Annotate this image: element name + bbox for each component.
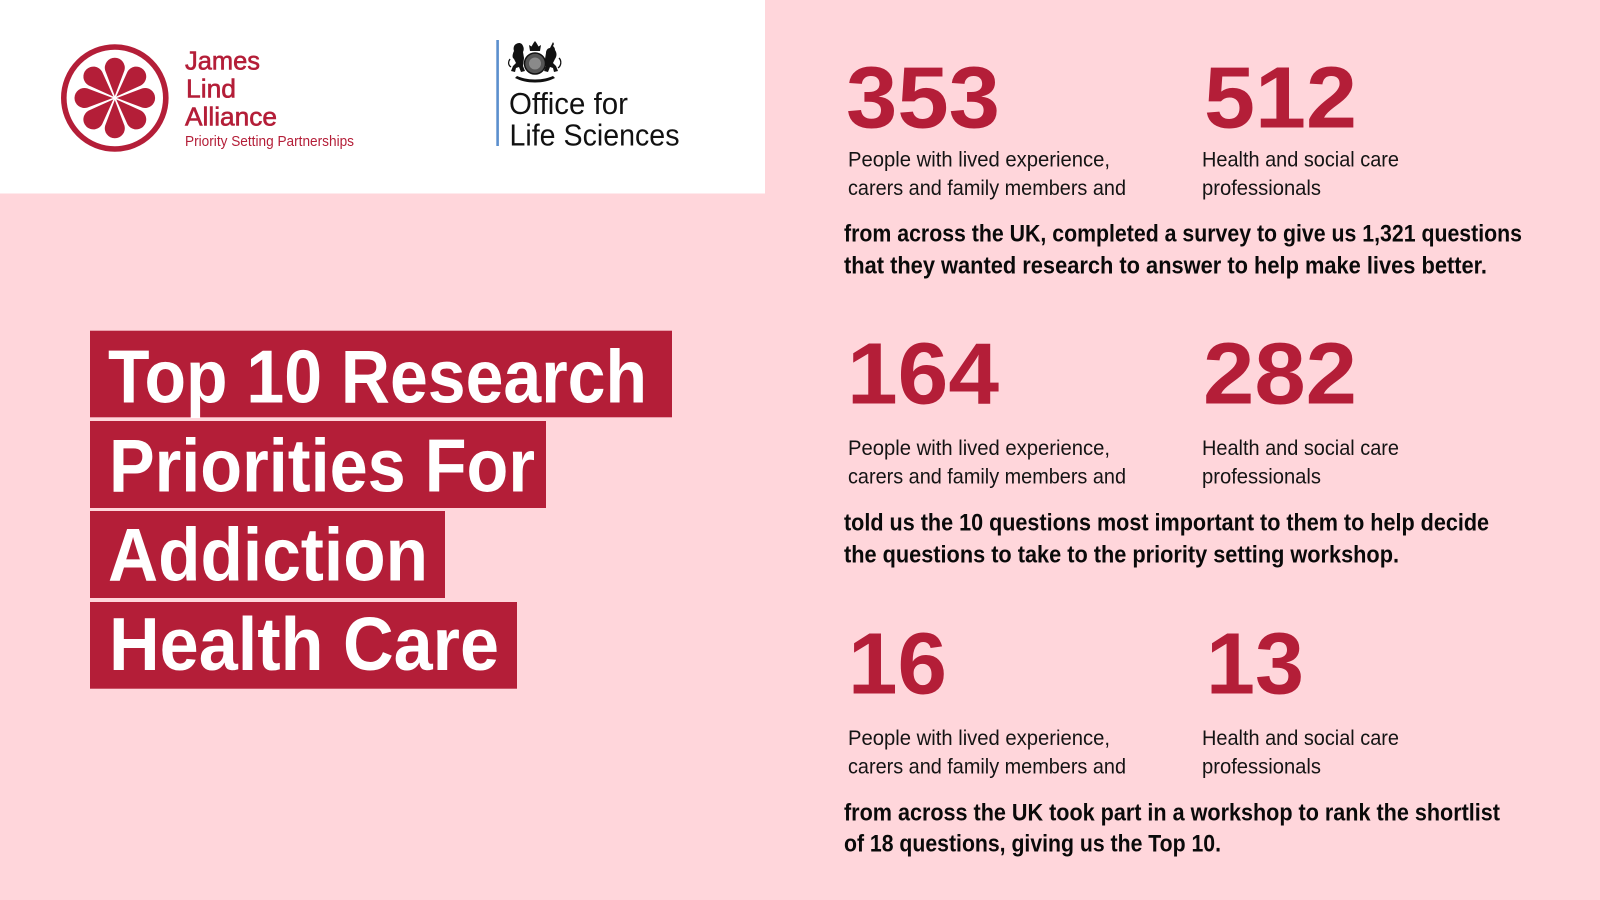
text: workshop summary: from across the UK took part in a workshop to rank the shortlist bbox=[844, 800, 1500, 827]
logo wordmark: Office for bbox=[509, 86, 628, 121]
title line 4: Health Care bbox=[109, 602, 499, 686]
text: workshop summary bbox=[844, 800, 1500, 858]
stat: 16 people with lived experience: carers and family members and bbox=[848, 755, 1126, 778]
stat: 512 health and social care professionals: professionals bbox=[1202, 177, 1321, 200]
text: workshop summary: of 18 questions, giving us the Top 10. bbox=[844, 831, 1221, 858]
stat: 164 people with lived experience: 164 bbox=[847, 325, 999, 422]
stat: 164 people with lived experience bbox=[847, 325, 1126, 488]
text: shortlisting summary: the questions to take to the priority setting workshop. bbox=[844, 541, 1399, 568]
stat: 13 health and social care professionals: 13 bbox=[1206, 615, 1304, 712]
panel: shortlisting stats bbox=[844, 325, 1489, 568]
title line 3: Addiction bbox=[108, 513, 428, 597]
logo: Office for Life Sciences: Life Sciences bbox=[510, 118, 680, 152]
stat: 282 health and social care professionals: professionals bbox=[1202, 465, 1321, 488]
panel: logo header bbox=[0, 0, 765, 194]
stat: 13 health and social care professionals: Health and social care bbox=[1202, 727, 1399, 750]
text: shortlisting summary bbox=[844, 510, 1489, 568]
text: survey summary: from across the UK, completed a survey to give us 1,321 questions bbox=[844, 221, 1522, 248]
icon: royal coat of arms bbox=[509, 41, 561, 82]
logo wordmark: James bbox=[185, 46, 260, 76]
stat: 164 people with lived experience: People with lived experience, bbox=[848, 437, 1110, 460]
stat: 282 health and social care professionals: 282 bbox=[1203, 325, 1357, 422]
stat: 353 people with lived experience: carers and family members and bbox=[848, 177, 1126, 200]
stat: 353 people with lived experience: People with lived experience, bbox=[848, 149, 1110, 172]
logo wordmark bbox=[185, 46, 277, 132]
stat: 16 people with lived experience bbox=[848, 615, 1126, 778]
stat: 13 health and social care professionals bbox=[1202, 615, 1399, 778]
stat: 282 health and social care professionals bbox=[1202, 325, 1399, 488]
title line 2: Priorities For bbox=[109, 424, 535, 508]
logo wordmark: Lind bbox=[186, 74, 236, 104]
stat: 512 health and social care professionals bbox=[1202, 50, 1399, 200]
logo wordmark: Alliance bbox=[185, 102, 277, 132]
text: survey summary bbox=[844, 221, 1522, 279]
stat: 16 people with lived experience: People with lived experience, bbox=[848, 727, 1110, 750]
heading: Top 10 Research Priorities For Addiction Health Care bbox=[90, 331, 672, 689]
title line 1: Top 10 Research bbox=[108, 335, 647, 419]
stat: 353 people with lived experience bbox=[846, 50, 1126, 200]
stat: 353 people with lived experience: 353 bbox=[846, 50, 1000, 146]
logo tagline: Priority Setting Partnerships bbox=[185, 134, 354, 150]
stat: 13 health and social care professionals: professionals bbox=[1202, 755, 1321, 778]
stat: 16 people with lived experience: 16 bbox=[848, 615, 947, 712]
text: survey summary: that they wanted research to answer to help make lives better. bbox=[844, 252, 1487, 279]
panel: workshop stats bbox=[844, 615, 1500, 858]
icon: citrus wheel bbox=[64, 47, 166, 149]
stat: 512 health and social care professionals: 512 bbox=[1204, 50, 1357, 146]
text: shortlisting summary: told us the 10 questions most important to them to help decide bbox=[844, 510, 1489, 537]
stat: 282 health and social care professionals: Health and social care bbox=[1202, 437, 1399, 460]
stat: 512 health and social care professionals: Health and social care bbox=[1202, 149, 1399, 172]
logo: James Lind Alliance bbox=[64, 46, 354, 150]
logo: Office for Life Sciences bbox=[496, 40, 680, 152]
stat: 164 people with lived experience: carers and family members and bbox=[848, 465, 1126, 488]
panel: survey stats bbox=[844, 50, 1522, 279]
